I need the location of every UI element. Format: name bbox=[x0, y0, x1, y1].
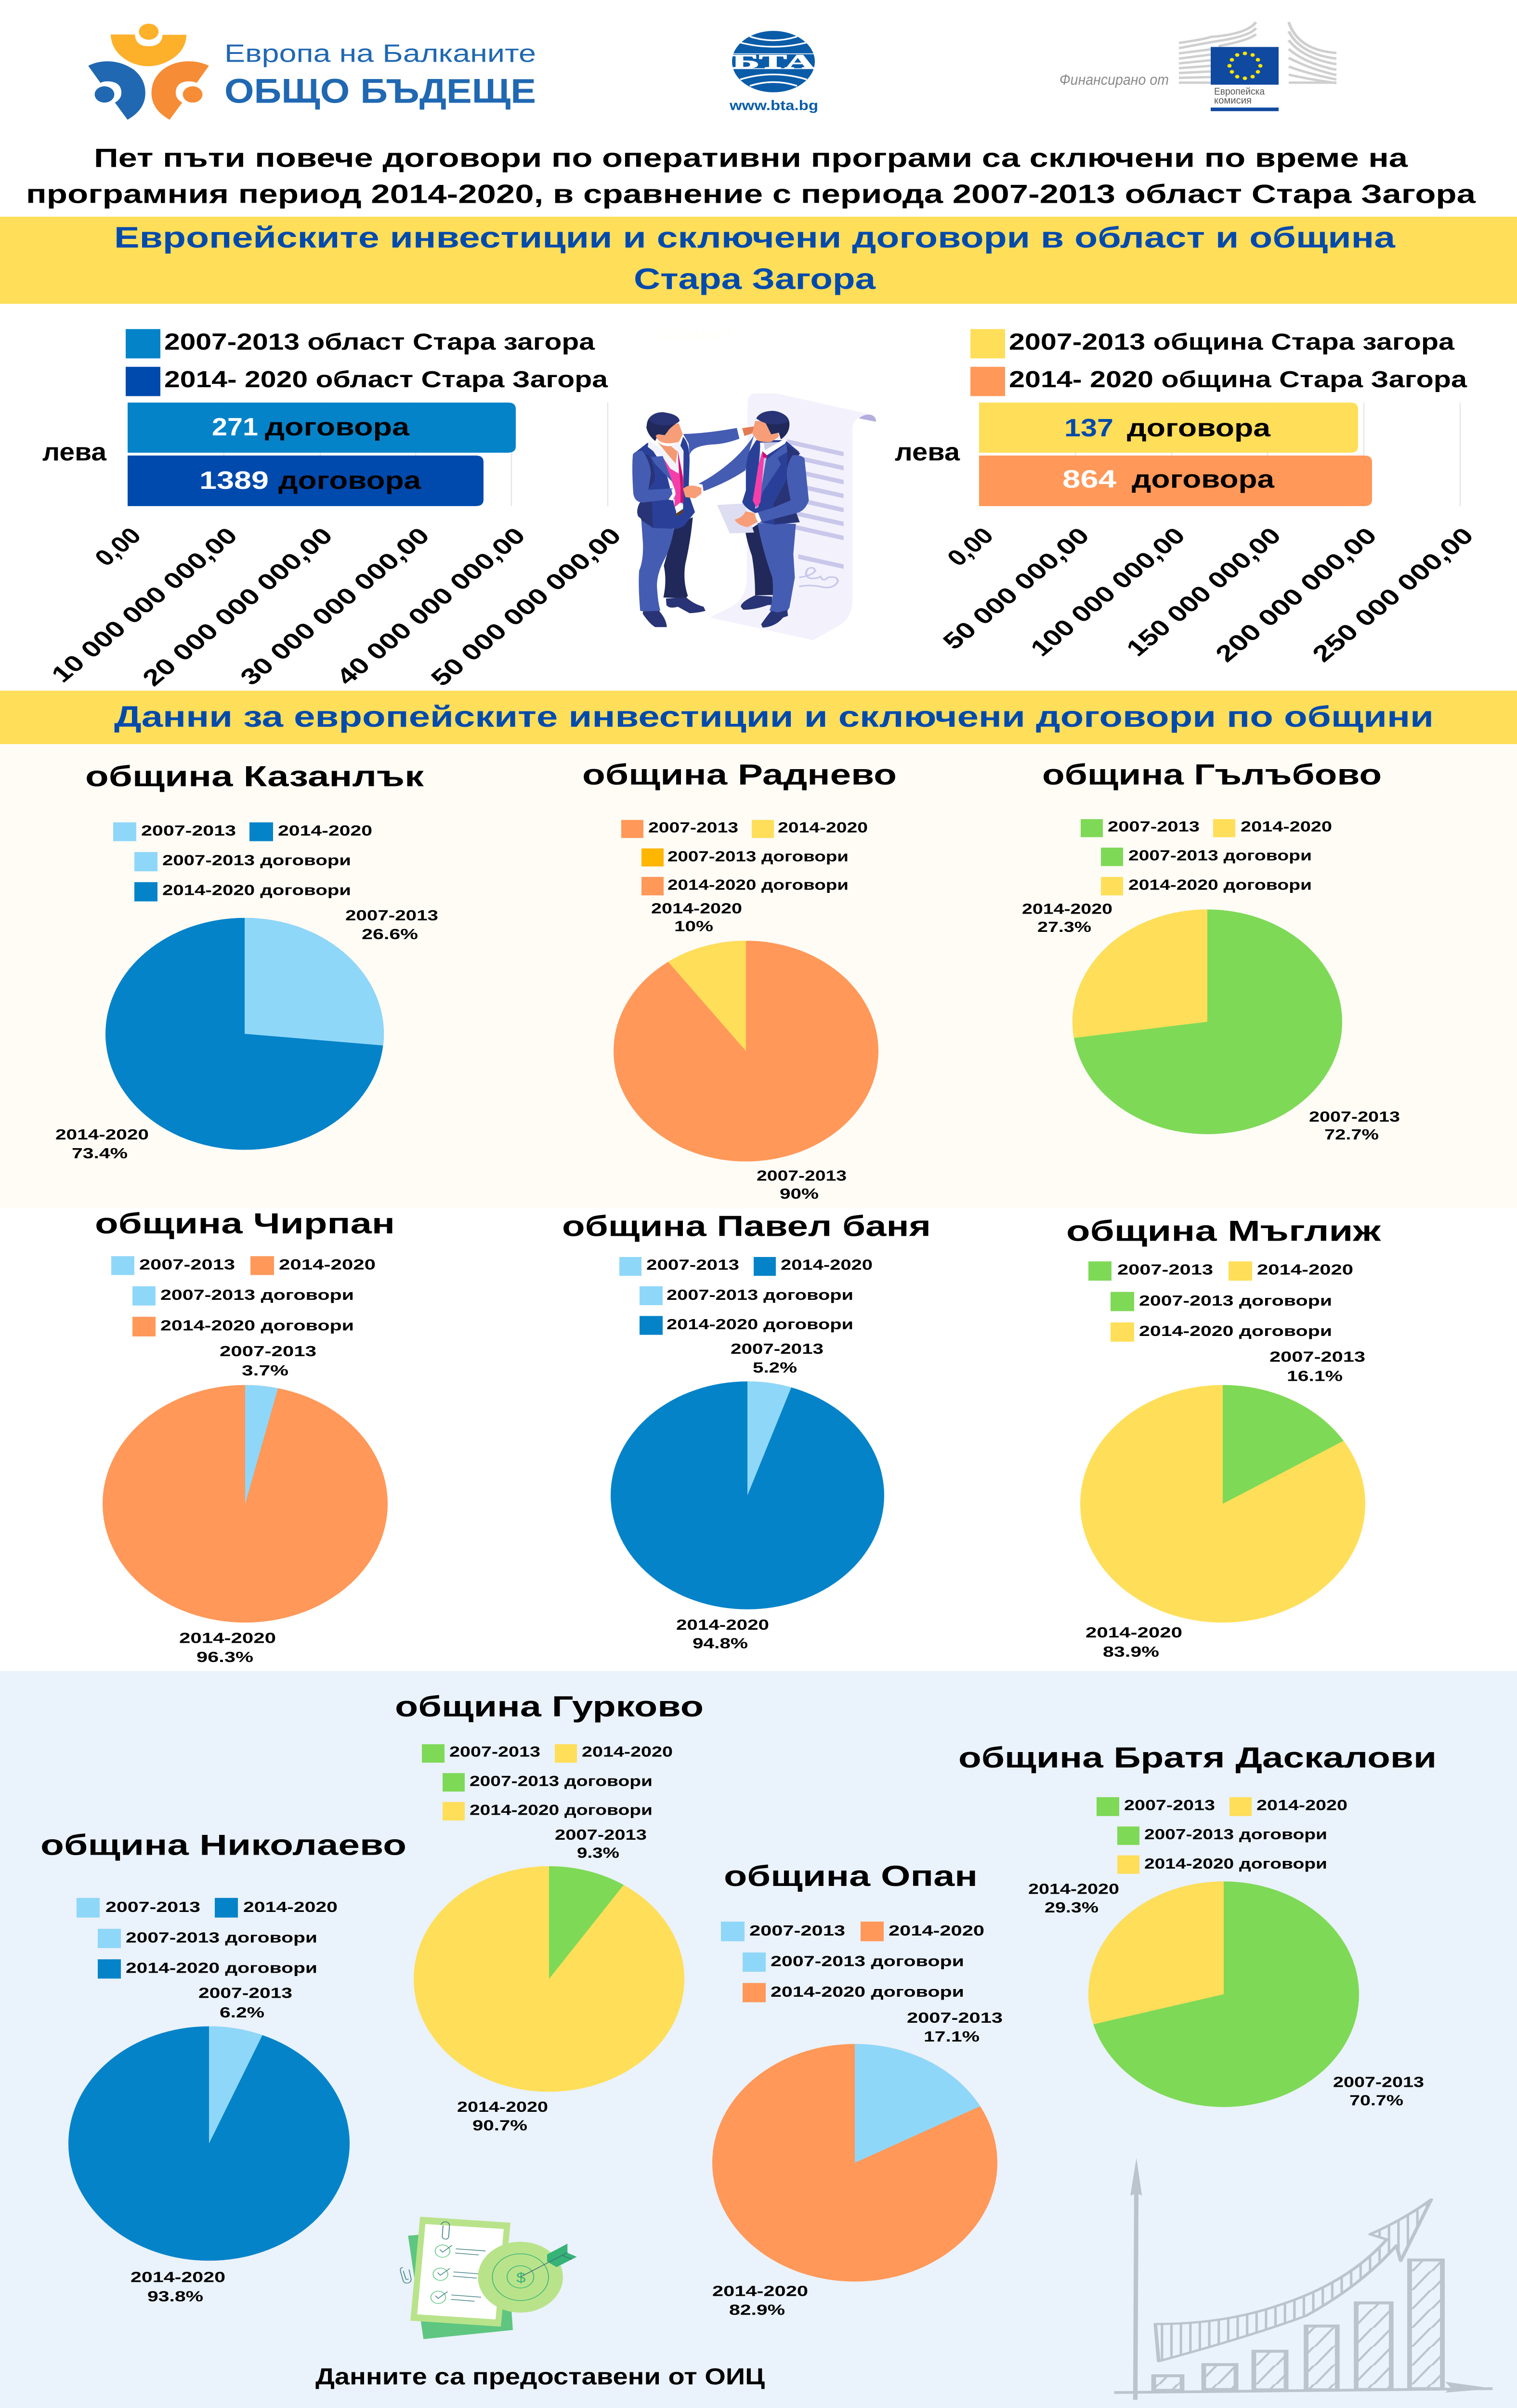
panel: община Чирпан bbox=[95, 1207, 395, 1665]
legend: 2007-2013 bbox=[1124, 1797, 1215, 1814]
pie chart: 2014-2020 bbox=[651, 901, 742, 917]
panel: община Гълъбово: община Гълъбово bbox=[1042, 759, 1382, 791]
logo: БТА: www.bta.bg bbox=[729, 98, 818, 113]
legend: 2014-2020 договори bbox=[1128, 877, 1312, 893]
axis labels: municipality: 50 000 000,00 bbox=[937, 523, 1095, 654]
bar: 2014-2020 municipality bbox=[979, 456, 1372, 506]
legend bbox=[621, 819, 868, 895]
bar: 2014-2020 region: 1389 bbox=[199, 467, 269, 495]
legend: 2014-2020 bbox=[1241, 819, 1332, 835]
legend: 2007-2013 bbox=[141, 823, 236, 839]
legend: 2007-2013 договори bbox=[470, 1773, 653, 1790]
panel: община Казанлък bbox=[55, 760, 438, 1162]
illustration: handshake and contract bbox=[632, 393, 876, 640]
axis labels: region: 50 000 000 000,00 bbox=[425, 523, 627, 691]
legend: 2014-2020 договори bbox=[160, 1317, 354, 1334]
panel: община Николаево: община Николаево bbox=[40, 1829, 406, 1861]
axis labels: municipality: 100 000 000,00 bbox=[1024, 523, 1190, 661]
legend: 2014-2020 договори bbox=[1139, 1323, 1332, 1339]
legend: 2007-2013 договори bbox=[1144, 1826, 1327, 1843]
pie chart: 2014-2020 bbox=[1022, 901, 1112, 917]
axis labels: municipality: 150 000 000,00 bbox=[1120, 523, 1286, 661]
legend: 2007-2013 договори bbox=[1128, 848, 1312, 864]
axis labels: municipality: 0,00 bbox=[941, 523, 999, 571]
panel: община Казанлък: община Казанлък bbox=[85, 760, 424, 793]
panel: община Гурково: община Гурково bbox=[395, 1691, 704, 1723]
legend: 2014-2020 bbox=[1256, 1797, 1347, 1814]
legend: 2014-2020 договори bbox=[1144, 1856, 1327, 1872]
logo: Европейска комисия: Европейска bbox=[1214, 86, 1265, 97]
pie chart: 2007-2013 bbox=[220, 1343, 316, 1360]
legend: municipality: 2014- 2020 община Стара Загора bbox=[1009, 367, 1467, 393]
pie chart: 82.9% bbox=[729, 2302, 785, 2318]
panel: община Опан bbox=[712, 1860, 1003, 2318]
pie chart bbox=[712, 2010, 1003, 2318]
legend: 2007-2013 договори bbox=[162, 852, 351, 869]
panel: община Павел баня: община Павел баня bbox=[562, 1210, 931, 1243]
bar: 2014-2020 region: договора bbox=[278, 467, 421, 495]
legend bbox=[1097, 1797, 1347, 1874]
pie chart: 2007-2013 bbox=[1309, 1109, 1400, 1125]
title bbox=[26, 143, 1476, 209]
pie chart bbox=[1080, 1348, 1365, 1660]
pie chart: 90.7% bbox=[472, 2117, 527, 2134]
pie chart: 2007-2013 bbox=[198, 1985, 292, 2002]
axis labels: region bbox=[45, 523, 627, 691]
pie chart: 16.1% bbox=[1287, 1368, 1343, 1385]
legend: region bbox=[126, 324, 733, 396]
pie chart: 2007-2013 bbox=[1269, 1348, 1365, 1365]
panel: region bar chart bbox=[42, 324, 733, 691]
pie chart: 29.3% bbox=[1045, 1899, 1099, 1916]
pie chart: 90% bbox=[780, 1186, 819, 1202]
left man bbox=[632, 412, 755, 627]
panel: община Раднево: община Раднево bbox=[582, 759, 897, 791]
legend: 2014-2020 bbox=[778, 819, 868, 836]
axis labels: region: 10 000 000 000,00 bbox=[45, 523, 243, 687]
legend: 2007-2013 договори bbox=[160, 1287, 354, 1303]
bar: 2007-2013 region: 271 bbox=[212, 413, 258, 441]
legend: 2007-2013 bbox=[449, 1743, 540, 1760]
pie chart bbox=[414, 1827, 684, 2134]
bar: 2007-2013 region bbox=[128, 403, 516, 453]
panel: община Братя Даскалови bbox=[958, 1742, 1437, 2109]
pie chart: 2014-2020 bbox=[55, 1126, 149, 1143]
legend bbox=[422, 1743, 673, 1820]
pie chart: 5.2% bbox=[753, 1360, 797, 1376]
pie chart: 96.3% bbox=[196, 1649, 253, 1665]
legend: 2014-2020 договори bbox=[667, 1316, 853, 1333]
panel: община Мъглиж bbox=[1066, 1215, 1381, 1660]
icon: sketch growth chart bbox=[1114, 2158, 1494, 2400]
legend: 2007-2013 договори bbox=[771, 1953, 964, 1970]
panel: община Николаево bbox=[40, 1829, 406, 2305]
legend: 2014-2020 bbox=[243, 1899, 338, 1915]
legend: municipality: 2007-2013 община Стара загора bbox=[1009, 329, 1455, 355]
panel: община Гурково bbox=[395, 1691, 704, 2134]
legend: 2014-2020 bbox=[889, 1923, 984, 1939]
legend: 2014-2020 bbox=[1257, 1262, 1353, 1278]
pie chart: 2014-2020 bbox=[131, 2269, 225, 2286]
panel: община Павел баня bbox=[562, 1210, 931, 1652]
logo: Европа на Балканите – Общо бъдеще bbox=[88, 24, 536, 120]
legend: 2014-2020 bbox=[278, 823, 372, 839]
pie chart: 2014-2020 bbox=[457, 2099, 548, 2115]
panel: община Опан: община Опан bbox=[724, 1860, 978, 1892]
legend: 2007-2013 bbox=[105, 1899, 200, 1915]
pie chart: 6.2% bbox=[220, 2004, 264, 2021]
legend bbox=[77, 1898, 338, 1978]
pie chart: 93.8% bbox=[147, 2288, 203, 2305]
panel: municipality bar chart bbox=[895, 329, 1479, 667]
legend: 2007-2013 договори bbox=[667, 1287, 853, 1303]
legend: 2014-2020 bbox=[582, 1743, 673, 1760]
legend: region: област bbox=[661, 324, 733, 344]
logo: Европа на Балканите – Общо бъдеще: Европа на Балканите bbox=[224, 39, 536, 67]
bar: 2007-2013 region: договора bbox=[265, 413, 410, 441]
axis labels: municipality bbox=[937, 523, 1479, 667]
legend: 2014-2020 договори bbox=[470, 1802, 653, 1819]
legend: 2007-2013 bbox=[1117, 1262, 1213, 1278]
legend: 2014-2020 bbox=[279, 1256, 376, 1273]
pie chart: 2007-2013 bbox=[907, 2010, 1003, 2026]
pie chart: 27.3% bbox=[1037, 919, 1091, 935]
panel: region bar chart: лева bbox=[42, 438, 107, 466]
axis labels: region: 20 000 000 000,00 bbox=[136, 523, 338, 691]
pie chart: 83.9% bbox=[1103, 1644, 1159, 1660]
bar: 2007-2013 municipality: договора bbox=[1127, 414, 1271, 442]
logo: БТА bbox=[729, 31, 818, 113]
pie chart: 2014-2020 bbox=[676, 1617, 769, 1633]
pie chart: 2007-2013 bbox=[757, 1168, 847, 1184]
right man bbox=[683, 411, 809, 628]
legend: region: 2014- 2020 област Стара Загора bbox=[164, 367, 608, 393]
legend: 2007-2013 договори bbox=[126, 1929, 317, 1946]
pie chart bbox=[68, 1985, 350, 2305]
logo: Европейска комисия: комисия bbox=[1214, 95, 1252, 106]
pie chart bbox=[1022, 901, 1400, 1143]
legend: 2007-2013 договори bbox=[667, 848, 849, 865]
legend bbox=[1088, 1261, 1353, 1342]
heading band: European investments: Европейските инвестиции и сключени договори в област и община bbox=[114, 221, 1396, 254]
panel: община Гълъбово bbox=[1022, 759, 1400, 1143]
legend: 2014-2020 договори bbox=[667, 877, 849, 893]
axis labels: region: 30 000 000 000,00 bbox=[234, 523, 435, 690]
legend bbox=[113, 823, 372, 902]
panel: община Мъглиж: община Мъглиж bbox=[1066, 1215, 1381, 1247]
legend: 2007-2013 bbox=[646, 1257, 739, 1273]
heading band: European investments: Стара Загора bbox=[634, 262, 876, 296]
pie chart: 10% bbox=[674, 918, 713, 935]
panel: община Раднево bbox=[582, 759, 897, 1202]
legend: 2014-2020 договори bbox=[771, 1984, 964, 2000]
bar: 2014-2020 region bbox=[128, 456, 484, 506]
pie chart: 2014-2020 bbox=[179, 1630, 276, 1647]
icon: checklist and target bbox=[400, 2217, 577, 2339]
bar: 2007-2013 municipality: 137 bbox=[1064, 414, 1113, 442]
pie chart: 2014-2020 bbox=[712, 2283, 808, 2300]
panel: община Братя Даскалови: община Братя Даскалови bbox=[958, 1742, 1437, 1774]
pie chart bbox=[1028, 1881, 1424, 2109]
axis labels: region: 0,00 bbox=[89, 523, 146, 571]
pie chart: 2014-2020 bbox=[1085, 1624, 1182, 1641]
logo: БТА: БТА bbox=[732, 51, 815, 73]
pie chart bbox=[614, 901, 878, 1202]
pie chart bbox=[103, 1343, 388, 1665]
pie chart: 2007-2013 bbox=[345, 907, 438, 924]
axis labels: municipality: 250 000 000,00 bbox=[1306, 523, 1479, 667]
legend bbox=[619, 1257, 873, 1335]
title: Пет пъти повече договори по оперативни програми са сключени по време на bbox=[94, 143, 1408, 172]
pie chart: 70.7% bbox=[1349, 2093, 1403, 2109]
panel: община Чирпан: община Чирпан bbox=[95, 1207, 395, 1240]
legend: municipality bbox=[970, 329, 1467, 396]
title: програмния период 2014-2020, в сравнение с периода 2007-2013 област Стара Загора bbox=[26, 179, 1476, 209]
bar: 2014-2020 municipality: договора bbox=[1132, 465, 1275, 493]
bar: 2007-2013 municipality bbox=[979, 403, 1358, 453]
icon: checklist and target: $ bbox=[516, 2270, 526, 2286]
pie chart: 26.6% bbox=[362, 926, 418, 942]
legend: 2007-2013 договори bbox=[1139, 1293, 1332, 1309]
legend: 2007-2013 bbox=[749, 1923, 845, 1939]
axis labels: municipality: 200 000 000,00 bbox=[1209, 523, 1382, 667]
pie chart bbox=[55, 907, 438, 1162]
legend: 2007-2013 bbox=[648, 819, 738, 836]
legend bbox=[111, 1256, 376, 1336]
heading band: European investments bbox=[0, 217, 1517, 304]
pie chart: 2007-2013 bbox=[555, 1827, 647, 1843]
pie chart: 94.8% bbox=[693, 1635, 748, 1652]
pie chart: 2007-2013 bbox=[1333, 2074, 1424, 2091]
panel: municipality bar chart: лева bbox=[895, 438, 960, 466]
axis labels: region: 40 000 000 000,00 bbox=[330, 523, 531, 690]
pie chart: 9.3% bbox=[577, 1845, 619, 1861]
logo: Европейска комисия bbox=[1059, 22, 1336, 111]
heading band: data by municipality: Данни за европейските инвестиции и сключени договори по общини bbox=[114, 700, 1434, 733]
pie chart bbox=[611, 1341, 884, 1652]
legend: 2007-2013 bbox=[1108, 819, 1200, 835]
legend bbox=[721, 1922, 984, 2002]
bar: 2014-2020 municipality: 864 bbox=[1062, 465, 1116, 493]
legend: 2014-2020 договори bbox=[126, 1960, 317, 1976]
pie chart: 3.7% bbox=[242, 1362, 288, 1379]
pie chart: 73.4% bbox=[72, 1145, 128, 1162]
legend: 2014-2020 bbox=[781, 1257, 873, 1273]
legend bbox=[1081, 819, 1332, 895]
logo: Европа на Балканите – Общо бъдеще: ОБЩО БЪДЕЩЕ bbox=[224, 71, 536, 110]
heading band: data by municipality bbox=[0, 691, 1517, 744]
legend: 2007-2013 bbox=[139, 1256, 235, 1273]
pie chart: 17.1% bbox=[924, 2028, 980, 2045]
legend: region: 2007-2013 област Стара загора bbox=[164, 329, 595, 355]
pie chart: 2014-2020 bbox=[1028, 1881, 1119, 1898]
footer note: Данните са предоставени от ОИЦ bbox=[315, 2364, 765, 2390]
legend: 2014-2020 договори bbox=[162, 882, 351, 899]
pie chart: 72.7% bbox=[1324, 1126, 1379, 1143]
logo: Европейска комисия: Финансирано от bbox=[1059, 71, 1169, 88]
pie chart: 2007-2013 bbox=[731, 1341, 824, 1357]
